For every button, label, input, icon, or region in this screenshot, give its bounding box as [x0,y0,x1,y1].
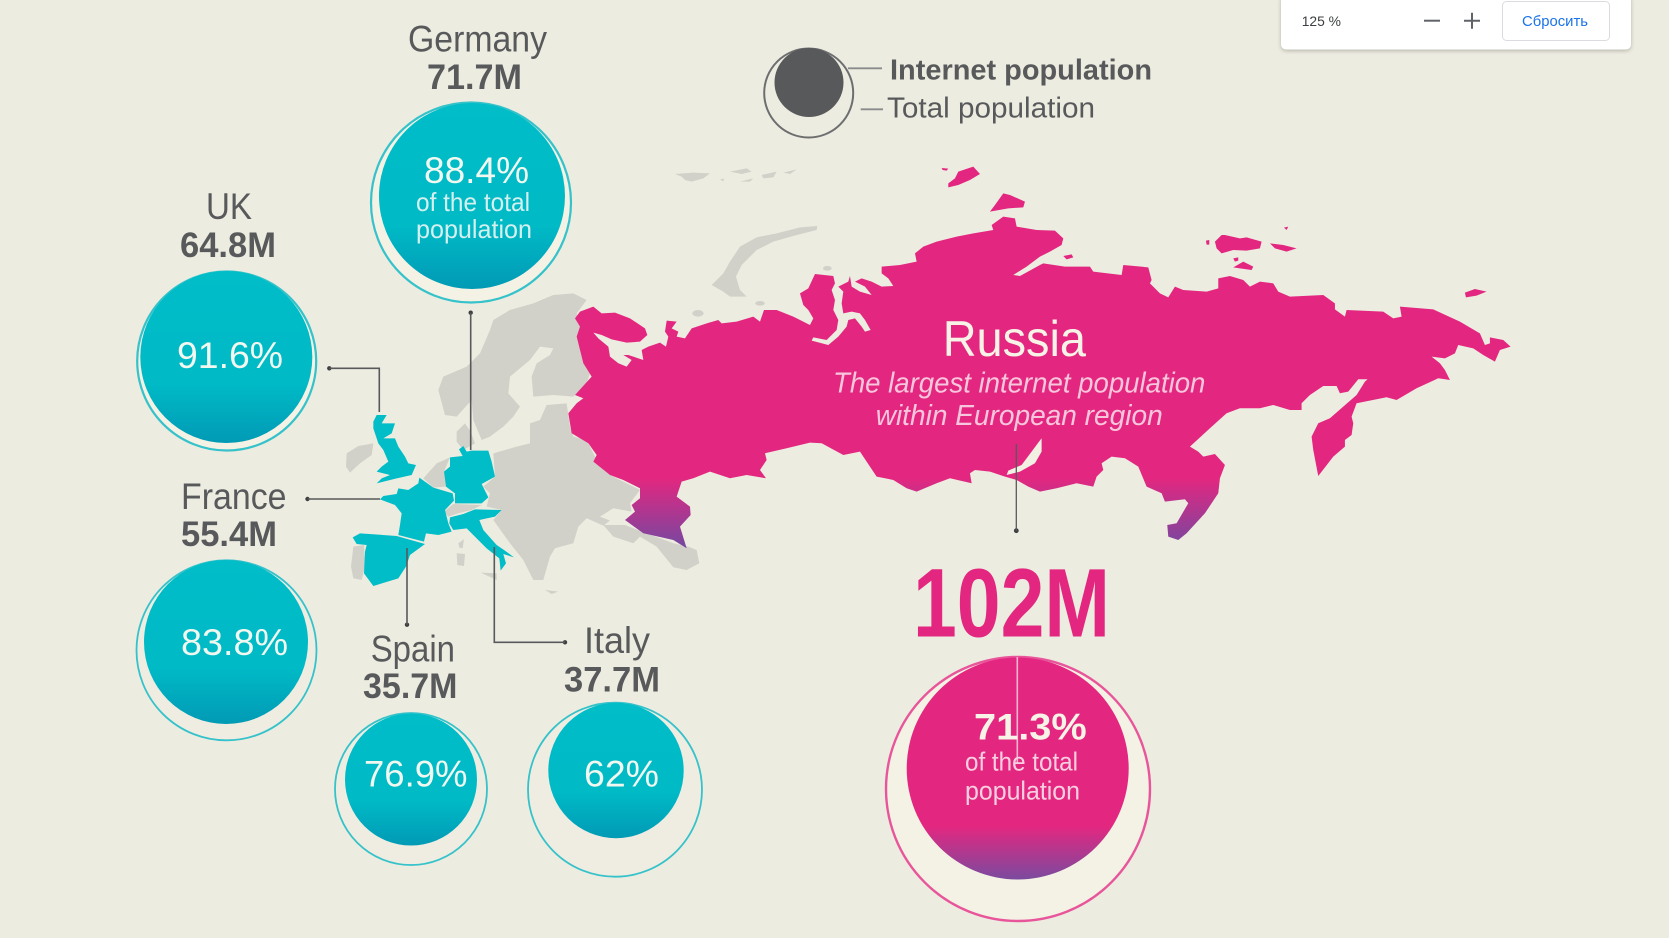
bubble: Russia: 71.3% [974,706,1087,747]
leader line: France [305,497,380,501]
heading: UK: UK [206,186,252,227]
map: highlighted countries [353,415,514,586]
leader line: Russia [1014,444,1019,533]
legend icon: nested circles [764,48,853,138]
heading: France: France [181,476,286,517]
bubble: UK [137,271,316,450]
text: Russia description [833,368,1205,432]
value: Italy population: 37.7M [564,661,660,700]
bubble: Spain [335,713,487,865]
legend text: total population: Total population [887,92,1095,124]
bubble: Spain: 76.9% [364,754,468,795]
bubble: Russia [886,657,1150,921]
text: Russia description: The largest internet population [833,368,1205,400]
bubble: Germany: of the total [416,187,530,217]
panel: France [136,476,316,740]
text: Russia description: within European region [876,400,1163,432]
map: Russia [568,167,1511,548]
value: UK population: 64.8M [180,226,276,265]
panel: Spain [335,629,487,865]
bubble: France: 83.8% [181,622,288,663]
bubble: Germany: population [416,214,532,244]
panel: Germany [371,19,571,302]
bubble: France [136,560,316,740]
legend [764,48,1152,138]
zoom toolbar [1281,0,1631,51]
bubble: UK: 91.6% [177,335,283,376]
panel: Russia [833,311,1205,921]
heading: Spain: Spain [371,629,455,670]
heading: Russia: Russia [943,311,1086,367]
bubble: Italy [528,703,702,877]
bubble: Germany [371,102,571,302]
leader line: Italy [494,547,567,644]
Spain [353,533,425,586]
map: grey Europe [346,293,699,594]
zoom level: 125 % [1302,13,1341,29]
reset button: Сбросить [1522,13,1588,30]
bubble: Germany: 88.4% [424,150,529,191]
bubble: Italy: 62% [584,754,659,795]
map: grey northern islands [675,168,832,317]
leader line: Spain [405,548,409,627]
bubble: Russia: of the total [965,747,1078,777]
value: Russia population: 102M [913,549,1110,658]
legend text: internet population: Internet population [890,54,1152,86]
value: France population: 55.4M [181,515,277,554]
Italy [449,509,514,571]
icon: minus [1424,20,1440,22]
Germany [444,446,495,503]
icon: plus [1464,13,1480,29]
value: Germany population: 71.7M [427,58,522,97]
heading: Italy: Italy [584,620,650,661]
UK [373,415,416,483]
leader line: Germany [468,310,473,450]
bubble: Russia: population [965,775,1080,805]
lake Baikal [1007,438,1042,475]
panel: Italy [528,620,702,877]
leader line: UK [327,366,379,412]
value: Spain population: 35.7M [363,667,458,706]
France [380,478,454,542]
heading: Germany: Germany [408,19,547,60]
reset button [1502,2,1610,40]
panel: UK [137,186,316,450]
